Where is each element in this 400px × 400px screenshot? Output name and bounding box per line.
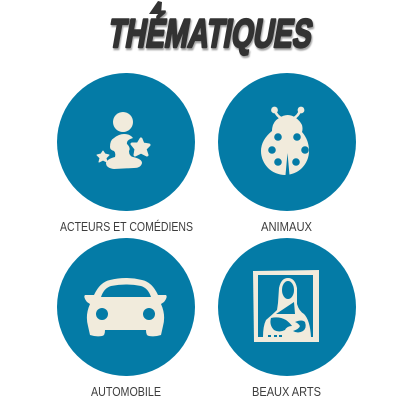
icon: ladybug [261, 107, 309, 175]
label: beaux arts: BEAUX ARTS [252, 385, 321, 399]
icon: car [84, 278, 167, 336]
title [105, 1, 317, 58]
panel: acteurs et comédiens [57, 73, 195, 234]
panel: beaux arts [218, 238, 356, 399]
icon: framed Mona Lisa [253, 270, 319, 342]
panel: automobile [57, 238, 195, 399]
circle: animaux [218, 73, 356, 211]
label: automobile: AUTOMOBILE [91, 385, 161, 399]
title: THÉMATIQUES [106, 13, 317, 58]
label: animaux: ANIMAUX [261, 220, 313, 234]
icon: person with stars [97, 112, 149, 169]
circle: beaux arts [218, 238, 356, 376]
circle: automobile [57, 238, 195, 376]
label: acteurs et comédiens: ACTEURS ET COMÉDIENS [60, 219, 193, 234]
panel: animaux [218, 73, 356, 234]
circle: acteurs [57, 73, 195, 211]
title: THÉMATIQUES [105, 11, 316, 56]
